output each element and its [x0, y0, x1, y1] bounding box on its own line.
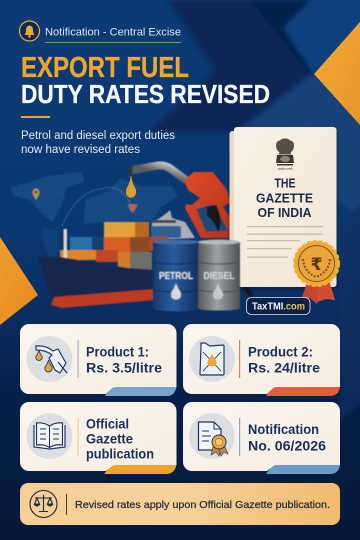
gazette publication text: [86, 416, 154, 462]
banner text: Revised rates apply upon Official Gazette publication.: [75, 499, 330, 511]
panel: notification number: [183, 402, 340, 474]
title: [21, 52, 270, 118]
gazette title text: OF INDIA: [258, 206, 312, 220]
subtitle: now have revised rates: [21, 144, 140, 156]
emblem: [276, 138, 294, 171]
title: DUTY RATES REVISED: [21, 79, 270, 109]
fuel nozzle: [129, 165, 252, 296]
notification text: [248, 422, 327, 454]
handle opening: [196, 204, 229, 232]
product 2 text: [248, 344, 321, 376]
gazette document: [230, 127, 336, 287]
subtitle: [21, 130, 175, 156]
panel: product 2: [183, 324, 340, 396]
gazette title text: [256, 176, 313, 220]
product 2 text: Product 2:: [248, 344, 313, 360]
container ship: [38, 210, 195, 308]
orange diamond right: [314, 22, 360, 125]
barrel: petrol: PETROL: [159, 270, 193, 282]
bottom banner: [20, 483, 340, 525]
gazette title text: GAZETTE: [256, 192, 313, 206]
header: notification label: [20, 21, 181, 43]
shipping route: [62, 187, 132, 226]
barrel: diesel: [198, 240, 240, 310]
notification text: Notification: [248, 422, 319, 437]
barrel: petrol: [153, 240, 199, 312]
notification text: No. 06/2026: [248, 438, 327, 454]
map location pin left: [32, 189, 40, 200]
title: EXPORT FUEL: [21, 52, 189, 84]
brand badge: TaxTMI.com: [252, 300, 305, 312]
world map: [10, 172, 178, 262]
product 1 text: Product 1:: [86, 344, 149, 360]
containers: [60, 222, 169, 270]
gazette publication text: Official: [86, 416, 129, 432]
icon: open book: [26, 413, 72, 459]
red nozzle body: [184, 172, 238, 238]
subtitle: Petrol and diesel export duties: [21, 130, 175, 142]
map location pin right: [128, 204, 137, 213]
hose: [232, 226, 252, 296]
red hull bottom: [51, 289, 156, 308]
panel: product 1: [20, 324, 176, 396]
icon: scales of justice: [30, 490, 57, 518]
panel: official gazette publication: [20, 402, 176, 474]
seal with rupee: ₹: [311, 255, 322, 275]
pipe: [130, 165, 187, 181]
emblem: सत्यमेव जयते: [278, 167, 293, 171]
icon: bell: [20, 21, 40, 41]
icon: certificate document: [189, 413, 235, 459]
gazette title text: THE: [274, 176, 296, 190]
product 2 text: Rs. 24/litre: [248, 360, 321, 376]
gazette publication text: publication: [86, 446, 154, 462]
document lines: [247, 226, 323, 258]
fuel drop: [126, 176, 136, 198]
barrel: diesel: DIESEL: [204, 270, 235, 282]
hull: [38, 257, 156, 298]
icon: jerry can: [189, 336, 235, 382]
product 1 text: [86, 344, 163, 376]
header: notification label: Notification - Central Excise: [45, 26, 181, 38]
seal with rupee: [294, 241, 339, 304]
mast: [64, 229, 67, 259]
icon: fuel nozzle with drops: [26, 336, 72, 382]
gazette publication text: Gazette: [86, 432, 133, 446]
product 1 text: Rs. 3.5/litre: [86, 360, 163, 376]
orange diamond left: [0, 237, 38, 325]
trigger: [207, 205, 221, 232]
brand badge: [246, 298, 310, 314]
ship superstructure: [151, 210, 195, 240]
